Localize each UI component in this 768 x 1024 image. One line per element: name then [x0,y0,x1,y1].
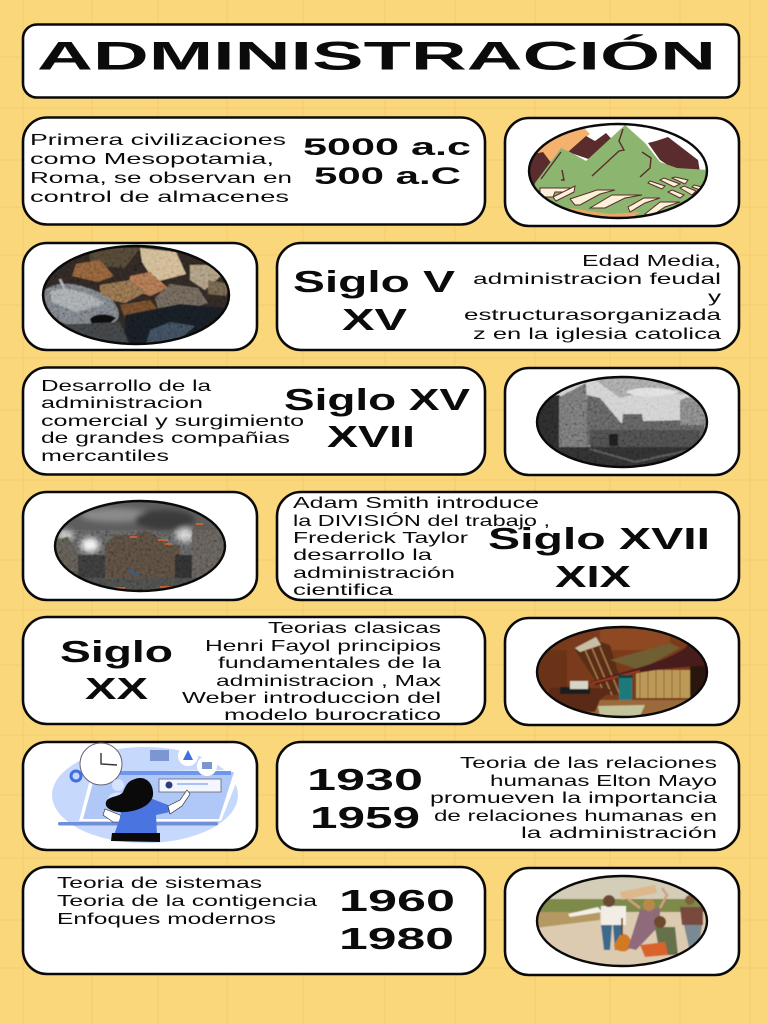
description: human relations theory: de relaciones humanas en [434,808,717,825]
description: Adam Smith and Taylor: la DIVISIÓN del trabajo , [293,511,550,530]
panel: Siglo XX [23,617,485,724]
description: Middle Ages [464,253,721,343]
description: Middle Ages: estructurasorganizada [464,307,721,324]
description: classical theories: Weber introduccion del [182,690,441,707]
date range: 1959 [310,800,420,835]
period heading: XIX [555,559,631,594]
period heading: Siglo V [293,264,455,299]
period heading [284,382,470,454]
panel: mountain illustration [505,118,739,226]
description: Middle Ages: administracion feudal [473,271,721,288]
date range [307,762,423,835]
period heading [293,264,455,337]
panel: armour photo [23,243,257,350]
description: Adam Smith and Taylor: cientifica [293,582,393,599]
panel: burning city photo [23,492,257,600]
description: commercial administration: Desarrollo de la [41,378,211,395]
description: modern approaches: Enfoques modernos [57,911,276,928]
date range: 1930 [307,762,423,797]
title text: ADMINISTRACIÓN [37,32,716,78]
period heading: XV [342,302,407,337]
description: human relations theory: humanas Elton Mayo [490,773,717,790]
date range: 500 a.C [314,163,461,190]
description: commercial administration: administracion [41,395,203,412]
panel: digital workspace illustration [23,742,257,850]
date range: 1980 [339,921,454,956]
date range [303,134,471,190]
photo: burning city [50,500,230,595]
panel: gramophone photo [505,618,739,725]
description: Adam Smith and Taylor: desarrollo la [293,547,432,564]
description: Middle Ages: Edad Media, [582,253,721,270]
description: classical theories: Henri Fayol principios [205,638,441,655]
date range: 1960 [339,883,455,918]
description: commercial administration [41,378,304,465]
photo: helmet and chain mail on logs [40,244,235,348]
description: modern approaches: Teoria de la contigencia [57,893,317,910]
description: commercial administration: de grandes compañias [41,430,290,447]
description: first civilizations: Roma, se observan en [30,170,292,187]
description: modern approaches: Teoria de sistemas [57,875,262,892]
description: first civilizations: control de almacenes [30,189,289,206]
description: human relations theory: promueven la importancia [430,790,717,807]
date range [339,883,455,956]
panel: Siglo V to XV [277,243,739,350]
period heading: Siglo [60,634,173,669]
description: human relations theory [430,755,717,842]
description: Middle Ages: y [708,289,721,306]
woman figure [103,778,190,842]
description: modern approaches [57,875,317,928]
description: human relations theory: Teoria de las relaciones [460,755,717,772]
photo: group with guitar on the road [535,875,710,970]
period heading: XX [85,671,148,706]
period heading: Siglo XV [284,382,470,417]
period heading: Siglo XVII [488,521,710,556]
description: classical theories: modelo burocratico [224,707,441,724]
period heading [488,521,710,594]
description: Adam Smith and Taylor [293,495,550,599]
date range: 5000 a.c [303,134,471,161]
icon: terraced mountain landscape [528,122,708,220]
period heading [60,634,173,706]
icon: woman at large screen [52,743,240,843]
photo: stone castle ruins [535,375,710,470]
description: Adam Smith and Taylor: administración [293,565,455,582]
period heading: XVII [327,419,415,454]
panel: 5000 a.c to 500 a.C [23,118,485,224]
description: human relations theory: la administración [521,825,717,842]
description: first civilizations [30,132,292,206]
description: Middle Ages: z en la iglesia catolica [473,326,721,343]
description: Adam Smith and Taylor: Frederick Taylor [293,530,469,547]
description: classical theories: Teorias clasicas [268,620,441,637]
panel: hippies on the road photo [505,868,739,975]
panel: 1930 to 1959 [277,742,739,850]
description: commercial administration: mercantiles [41,448,169,465]
panel: 1960 to 1980 [23,867,485,974]
description: first civilizations: como Mesopotamia, [30,151,274,168]
description: commercial administration: comercial y surgimiento [41,413,304,430]
description: classical theories: administracion , Max [216,673,441,690]
description: Adam Smith and Taylor: Adam Smith introduce [293,495,539,512]
panel: Siglo XV to XVII [23,368,485,474]
panel: castle photo [505,368,739,475]
panel: Siglo XVII to XIX [277,492,739,600]
title banner [23,24,739,98]
description: first civilizations: Primera civilizaciones [30,132,286,149]
description: classical theories [182,620,441,724]
description: classical theories: fundamentales de la [218,655,441,672]
photo: gramophone in wooden room [535,625,712,720]
